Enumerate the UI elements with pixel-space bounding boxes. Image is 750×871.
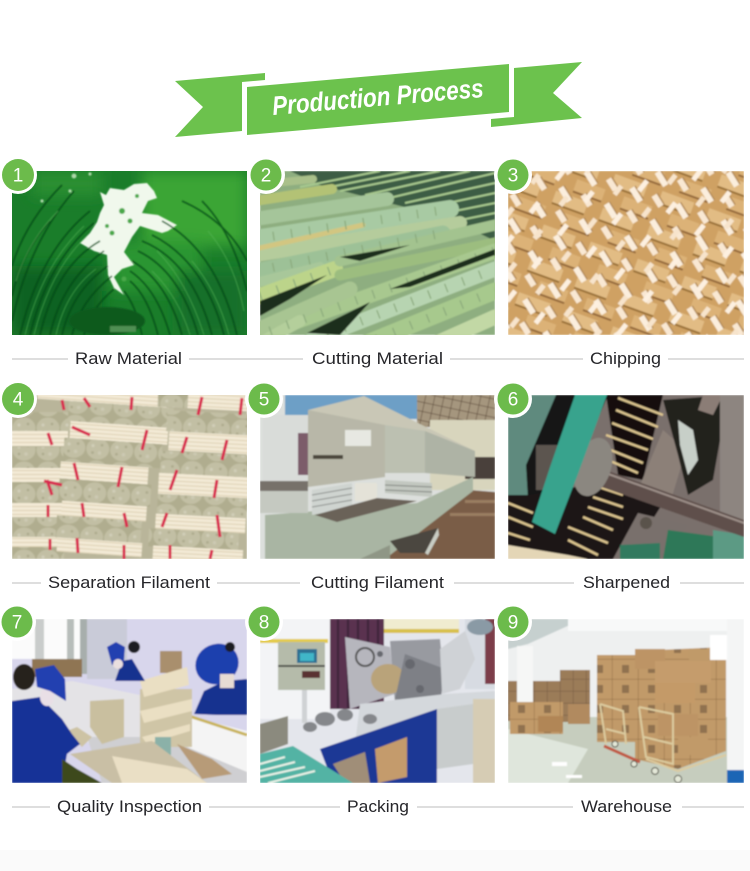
number badge 4	[0, 380, 37, 418]
photo: bamboo forest	[12, 171, 247, 335]
number badge 6: 6	[508, 390, 518, 410]
photo: stacked bamboo bundles	[12, 395, 247, 559]
title text: Production Process	[271, 73, 485, 121]
panel 7: quality inspection	[0, 603, 247, 816]
panel 8: packing	[209, 603, 495, 816]
photo: sharpening machine	[508, 395, 744, 559]
label: sharpened: Sharpened	[583, 574, 670, 592]
panel 5: cutting filament	[217, 380, 495, 592]
title ribbon	[175, 62, 582, 137]
number badge 2	[247, 156, 285, 194]
photo: bamboo chips	[508, 171, 744, 335]
label: packing: Packing	[347, 798, 409, 816]
number badge 4: 4	[13, 390, 24, 410]
number badge 5	[245, 380, 283, 418]
photo: workers inspecting	[12, 619, 247, 783]
panel 2: cutting material	[189, 156, 495, 368]
number badge 9: 9	[508, 612, 518, 634]
ribbon right tail	[491, 62, 582, 127]
label: chipping: Chipping	[590, 350, 661, 368]
number badge 2: 2	[261, 166, 271, 186]
number badge 8: 8	[259, 612, 269, 634]
panel 3: chipping	[450, 156, 744, 368]
number badge 7	[0, 603, 36, 641]
label: cutting filament: Cutting Filament	[311, 574, 444, 592]
panel 9: warehouse	[417, 603, 744, 816]
panel 1: raw material	[0, 156, 247, 368]
number badge 8	[245, 603, 283, 641]
panel 4: separation filament	[0, 380, 259, 592]
number badge 1	[0, 156, 37, 194]
number badge 7: 7	[12, 612, 22, 634]
label: warehouse: Warehouse	[581, 798, 672, 816]
label: raw material: Raw Material	[75, 350, 182, 368]
label: quality inspection: Quality Inspection	[57, 798, 202, 816]
ribbon left tail	[175, 73, 265, 137]
panel 6: sharpened	[454, 380, 744, 592]
number badge 9	[494, 603, 532, 641]
number badge 3	[494, 156, 532, 194]
photo: packing machine	[260, 619, 495, 783]
number badge 5: 5	[259, 390, 269, 410]
photo: bamboo stalks	[260, 171, 495, 335]
number badge 1: 1	[13, 166, 23, 186]
photo: warehouse with cartons	[508, 619, 744, 783]
number badge 6	[494, 380, 532, 418]
label: cutting material: Cutting Material	[312, 350, 443, 368]
label: separation filament: Separation Filament	[48, 574, 210, 592]
photo: filament cutting machine	[260, 395, 495, 559]
ribbon centre band	[247, 64, 509, 135]
number badge 3: 3	[508, 166, 518, 186]
